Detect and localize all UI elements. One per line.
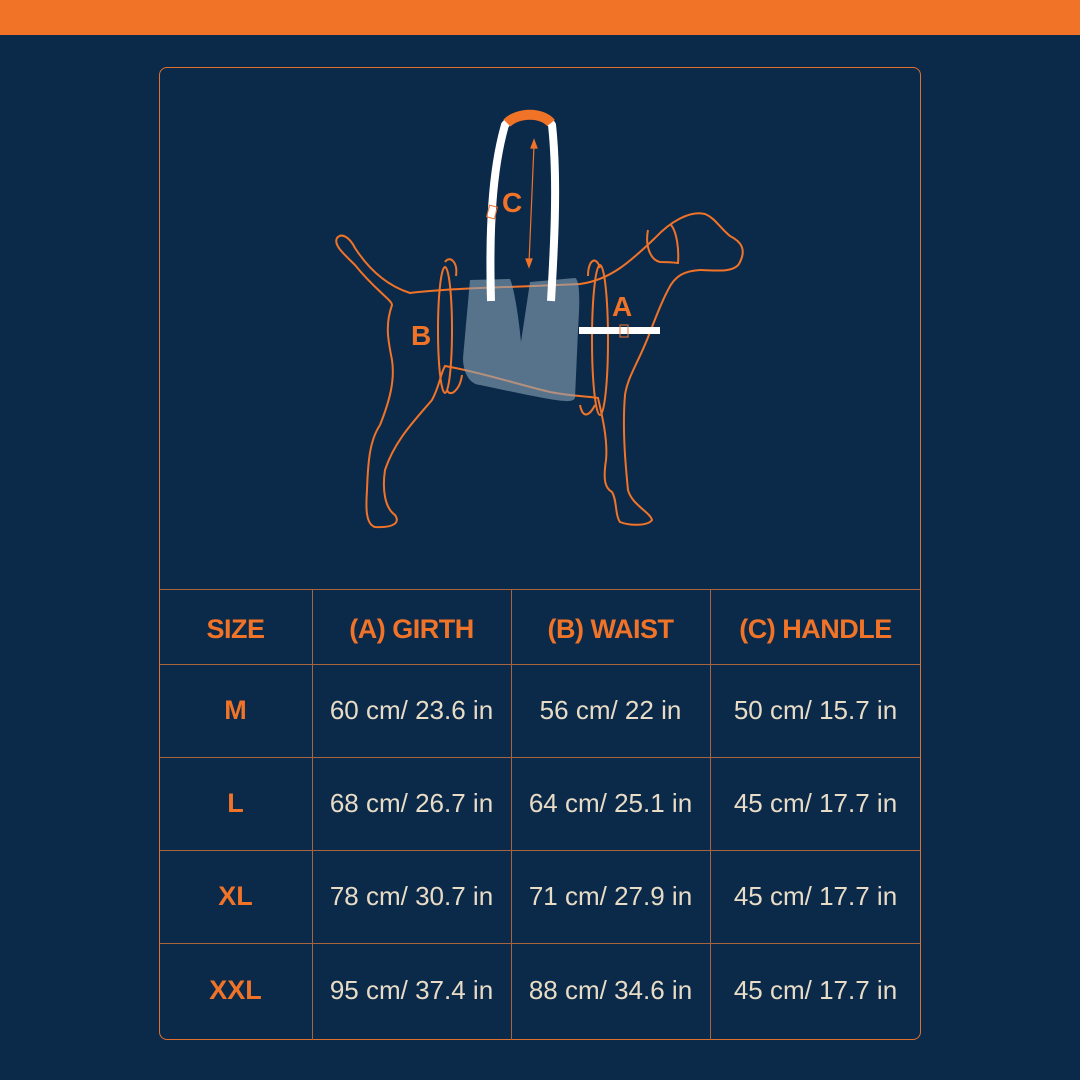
illustration: dog with harness — [335, 110, 744, 528]
row M — [224, 695, 897, 725]
girth strap — [579, 327, 660, 334]
labels: C — [502, 187, 522, 218]
row M: 60 cm/ 23.6 in — [330, 695, 493, 725]
row XXL: 45 cm/ 17.7 in — [734, 975, 897, 1005]
labels: A — [612, 291, 632, 322]
row XXL: 95 cm/ 37.4 in — [330, 975, 493, 1005]
row XXL: 88 cm/ 34.6 in — [529, 975, 692, 1005]
row XL: 71 cm/ 27.9 in — [529, 881, 692, 911]
row XL: 78 cm/ 30.7 in — [330, 881, 493, 911]
panel: frame — [159, 67, 921, 1040]
labels — [411, 187, 632, 351]
handle length arrow — [526, 140, 537, 267]
row XXL — [209, 975, 897, 1005]
row L: 45 cm/ 17.7 in — [734, 788, 897, 818]
table header: (C) HANDLE — [739, 614, 892, 644]
row M: 50 cm/ 15.7 in — [734, 695, 897, 725]
table header: (B) WAIST — [548, 614, 673, 644]
row L: 64 cm/ 25.1 in — [529, 788, 692, 818]
dog outline — [336, 213, 743, 527]
top orange bar — [0, 0, 1080, 35]
row L: L — [227, 788, 244, 818]
row M: 56 cm/ 22 in — [540, 695, 681, 725]
harness body pad — [463, 278, 579, 401]
row XL: 45 cm/ 17.7 in — [734, 881, 897, 911]
row XL — [218, 881, 897, 911]
table header — [206, 614, 892, 644]
handle strap — [490, 115, 555, 301]
row XL: XL — [218, 881, 253, 911]
row L — [227, 788, 897, 818]
table header: (A) GIRTH — [349, 614, 474, 644]
table header: SIZE — [206, 614, 264, 644]
labels: B — [411, 320, 431, 351]
row L: 68 cm/ 26.7 in — [330, 788, 493, 818]
row M: M — [224, 695, 247, 725]
row XXL: XXL — [209, 975, 262, 1005]
